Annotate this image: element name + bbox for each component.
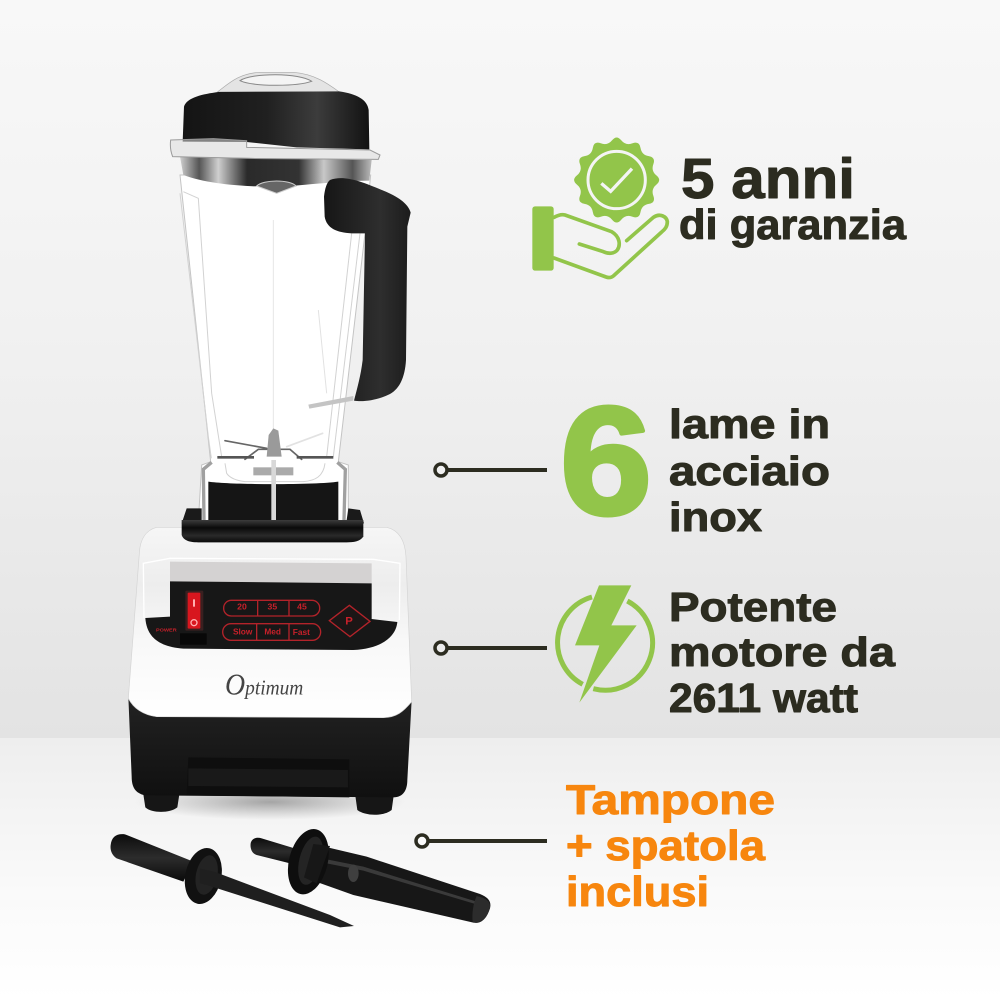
speed labels: Slow bbox=[233, 626, 253, 636]
white housing bbox=[128, 527, 412, 718]
blade floor bbox=[217, 456, 333, 459]
jar rim bbox=[170, 139, 380, 159]
jar inner lines bbox=[180, 192, 360, 482]
blade shaft bbox=[267, 428, 282, 457]
jar neck band bbox=[180, 157, 372, 187]
vent recess bbox=[187, 757, 349, 797]
jar vent bbox=[257, 181, 296, 193]
text: potente motore: 2611 watt bbox=[669, 675, 858, 721]
cuff bbox=[532, 206, 554, 271]
text: potente motore bbox=[669, 584, 896, 721]
jar cap bbox=[217, 72, 339, 92]
text: lame in acciaio inox: lame in bbox=[669, 401, 830, 447]
jar lid bbox=[183, 91, 369, 149]
black lower housing bbox=[128, 697, 412, 797]
housing bevel bbox=[143, 558, 400, 620]
timer labels: 35 bbox=[268, 601, 277, 611]
heading: di garanzia: di garanzia bbox=[679, 201, 907, 248]
text: potente motore: Potente bbox=[669, 584, 837, 630]
heading: 5 anni: 5 anni bbox=[681, 147, 855, 211]
background wall bbox=[0, 0, 1000, 738]
jar body bbox=[180, 175, 371, 522]
speed labels: Med bbox=[264, 626, 281, 636]
text: tampone e spatola bbox=[566, 776, 775, 915]
hand outline bbox=[554, 215, 667, 278]
blender base bbox=[128, 520, 412, 815]
control panel bbox=[145, 581, 397, 650]
badge bbox=[574, 137, 659, 223]
power label: POWER bbox=[156, 628, 178, 633]
connector: accessories bbox=[416, 835, 547, 847]
text: potente motore: motore da bbox=[669, 629, 896, 675]
pulse button bbox=[329, 605, 370, 637]
icon: lightning bolt bbox=[558, 585, 653, 703]
text: lame in acciaio inox: acciaio bbox=[669, 448, 830, 494]
connector: blades bbox=[435, 464, 547, 476]
jar handle rod bbox=[308, 396, 353, 409]
feet bbox=[143, 790, 394, 815]
blades bbox=[225, 433, 323, 459]
blade hub bbox=[253, 467, 293, 475]
text: lame in acciaio inox: inox bbox=[669, 494, 762, 540]
text: lame in acciaio inox bbox=[669, 401, 830, 540]
accessory: spatula bbox=[111, 834, 354, 927]
speed labels bbox=[233, 626, 310, 637]
grey fascia bbox=[170, 562, 372, 583]
clear collar edges bbox=[203, 462, 345, 520]
timer buttons bbox=[224, 600, 320, 616]
black jar seat bbox=[182, 520, 363, 542]
connector: motor bbox=[435, 642, 547, 654]
text: tampone e spatola: inclusi bbox=[566, 868, 709, 915]
timer labels: 45 bbox=[297, 601, 307, 611]
timer labels bbox=[237, 601, 307, 611]
pulse label: P bbox=[345, 616, 353, 628]
coupling shaft bbox=[271, 460, 276, 520]
black coupling bbox=[208, 482, 338, 520]
timer labels: 20 bbox=[237, 601, 247, 611]
brand logo: Optimum bbox=[225, 668, 303, 702]
icon: warranty badge and hand bbox=[532, 137, 667, 278]
jar seat corners bbox=[182, 508, 364, 523]
badge ring bbox=[588, 151, 645, 209]
jar handle bbox=[324, 178, 411, 401]
blender shadow bbox=[135, 784, 405, 820]
power switch bbox=[180, 591, 207, 645]
accessory: tamper bbox=[251, 825, 490, 923]
big number 6: 6 bbox=[560, 375, 652, 547]
background floor bbox=[0, 738, 1000, 1000]
blender jar bbox=[170, 72, 411, 523]
text: tampone e spatola: Tampone bbox=[566, 776, 775, 823]
speed buttons bbox=[223, 624, 321, 640]
check mark bbox=[601, 169, 632, 191]
speed labels: Fast bbox=[293, 627, 310, 637]
text: tampone e spatola: + spatola bbox=[566, 822, 766, 869]
